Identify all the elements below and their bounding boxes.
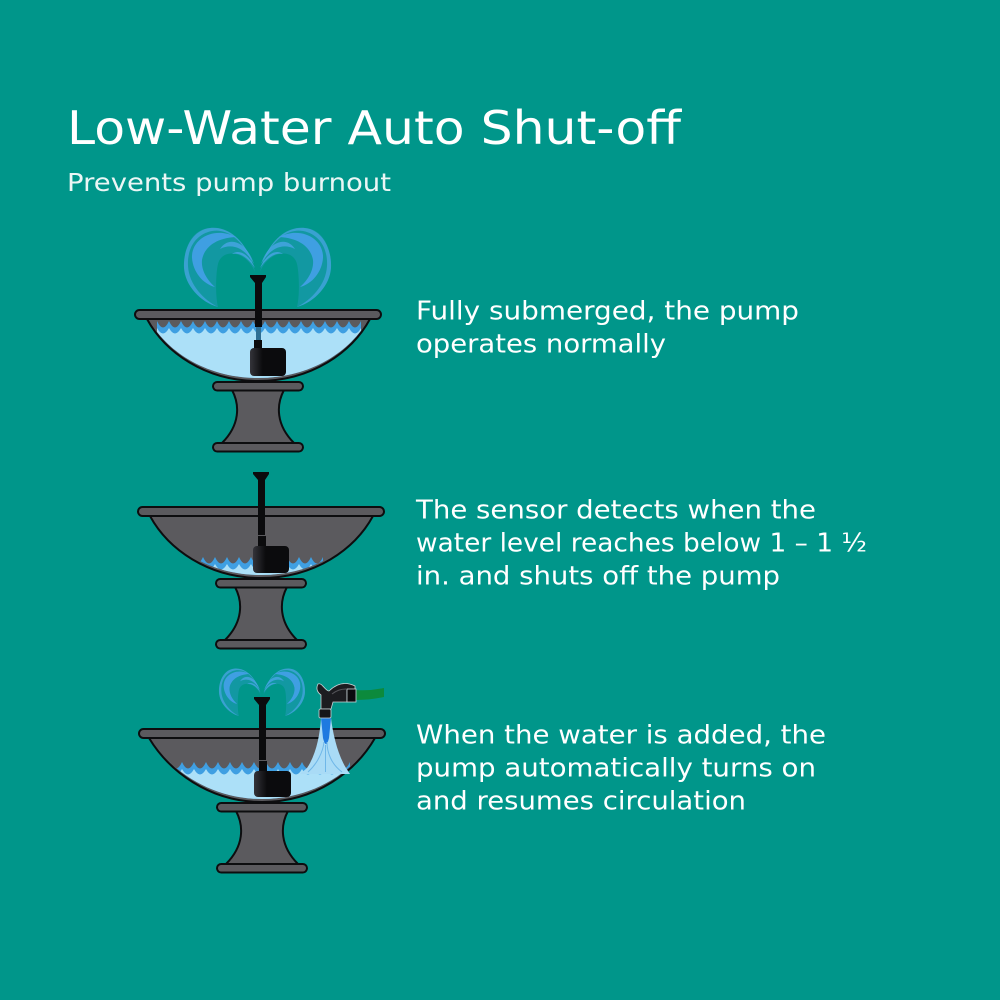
water (157, 321, 361, 380)
water (170, 762, 350, 800)
fountain pedestal (217, 803, 307, 872)
text: step 1 (416, 296, 799, 360)
text: step 3 (416, 720, 826, 816)
fountain pedestal (216, 579, 306, 648)
pump and pipe (253, 472, 289, 573)
text: step 3: When the water is added, the (416, 720, 826, 750)
bowl (150, 516, 373, 578)
text: step 2 (415, 496, 867, 592)
rim (135, 310, 381, 319)
fountain 2: low water pump off (138, 472, 384, 648)
fountain 3: water added pump resumes (139, 668, 385, 872)
text: step 2: in. and shuts off the pump (416, 562, 780, 592)
title: Low-Water Auto Shut-off (67, 101, 682, 155)
text: step 2: water level reaches below 1 – 1 ½ (416, 528, 867, 558)
icon: water jets (219, 668, 305, 716)
text: step 1: operates normally (416, 330, 666, 360)
icon: hose and nozzle (317, 684, 384, 718)
text: step 3: pump automatically turns on (416, 754, 816, 784)
bowl (149, 738, 375, 802)
subtitle: Prevents pump burnout (67, 168, 391, 197)
bowl (147, 319, 370, 381)
pump and pipe (250, 275, 286, 376)
text: step 3: and resumes circulation (416, 786, 746, 816)
rim (139, 729, 385, 738)
fountain pedestal (213, 382, 303, 452)
water (200, 557, 323, 575)
icon: water jets (184, 228, 331, 307)
text: step 1: Fully submerged, the pump (416, 296, 799, 326)
icon: water stream from hose (300, 718, 350, 774)
pump and pipe (254, 697, 291, 797)
rim (138, 507, 384, 516)
text: step 2: The sensor detects when the (415, 496, 816, 526)
fountain 1: fully submerged pump running (135, 228, 381, 452)
